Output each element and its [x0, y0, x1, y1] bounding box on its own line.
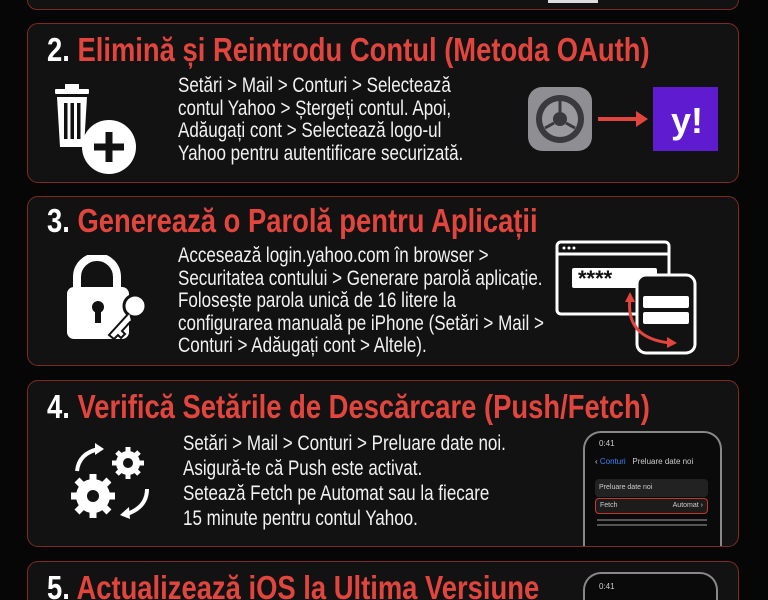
phone screenshot: iOS update: [583, 572, 718, 600]
phone screenshot: fetch settings: ‹ Conturi Preluare date noi: [595, 457, 693, 466]
icon: browser and phone: ****: [578, 266, 613, 291]
phone screenshot: fetch settings: Automat ›: [673, 502, 703, 509]
text: step 2: [178, 74, 463, 164]
text: step 2: Yahoo pentru autentificare securizată.: [178, 142, 463, 164]
text: step 4: Asigură-te că Push este activat.: [183, 457, 422, 480]
icon: gears with arrows: [71, 443, 149, 519]
text: step 3: Accesează login.yahoo.com în browser >: [178, 244, 489, 267]
icon: settings arrow yahoo: y!: [671, 100, 703, 141]
panel: step 5: [27, 561, 739, 600]
icon: browser and phone: [556, 240, 696, 354]
phone screenshot: fetch settings: [583, 431, 722, 553]
text: step 2: Adăugați cont > Selectează logo-ul: [178, 119, 441, 142]
text: step 3: Folosește parola unică de 16 litere la: [178, 289, 456, 312]
panel: step 4: [27, 380, 739, 547]
text: step 4: 15 minute pentru contul Yahoo.: [183, 507, 418, 530]
text: step 3: Securitatea contului > Generare parolă aplicație.: [178, 266, 543, 290]
icon: trash and plus: [55, 84, 136, 174]
text: step 2: contul Yahoo > Ștergeți contul. Apoi,: [178, 96, 451, 120]
phone screenshot: fetch settings: 0:41: [599, 439, 615, 448]
panel: step 2: [27, 23, 739, 183]
text: step 4: Setări > Mail > Conturi > Preluare date noi.: [183, 432, 506, 455]
phone screenshot: iOS update: 0:41: [599, 582, 615, 591]
heading 2: 2. Elimină și Reintrodu Contul (Metoda OAuth): [47, 31, 650, 68]
icon: settings arrow yahoo: [528, 87, 718, 151]
text: step 2: Setări > Mail > Conturi > Selectează: [178, 74, 451, 97]
icon: padlock with key: [67, 255, 144, 339]
text: step 4: Setează Fetch pe Automat sau la fiecare: [183, 482, 489, 505]
text: step 3: Conturi > Adăugați cont > Altele).: [178, 334, 427, 357]
phone screenshot: fetch settings: Preluare date noi: [599, 484, 652, 491]
panel: step 1 (cropped): [27, 0, 739, 10]
heading 4: 4. Verifică Setările de Descărcare (Push/Fetch): [47, 388, 650, 425]
phone screenshot: fetch settings: Fetch: [600, 502, 618, 509]
text: step 4: [183, 432, 506, 530]
heading 3: 3. Generează o Parolă pentru Aplicații: [47, 202, 538, 239]
text: step 3: configurarea manuală pe iPhone (Setări > Mail >: [178, 312, 544, 334]
text: step 3: [178, 244, 544, 357]
thumbnails: [548, 0, 598, 3]
panel: step 3: [27, 196, 739, 366]
